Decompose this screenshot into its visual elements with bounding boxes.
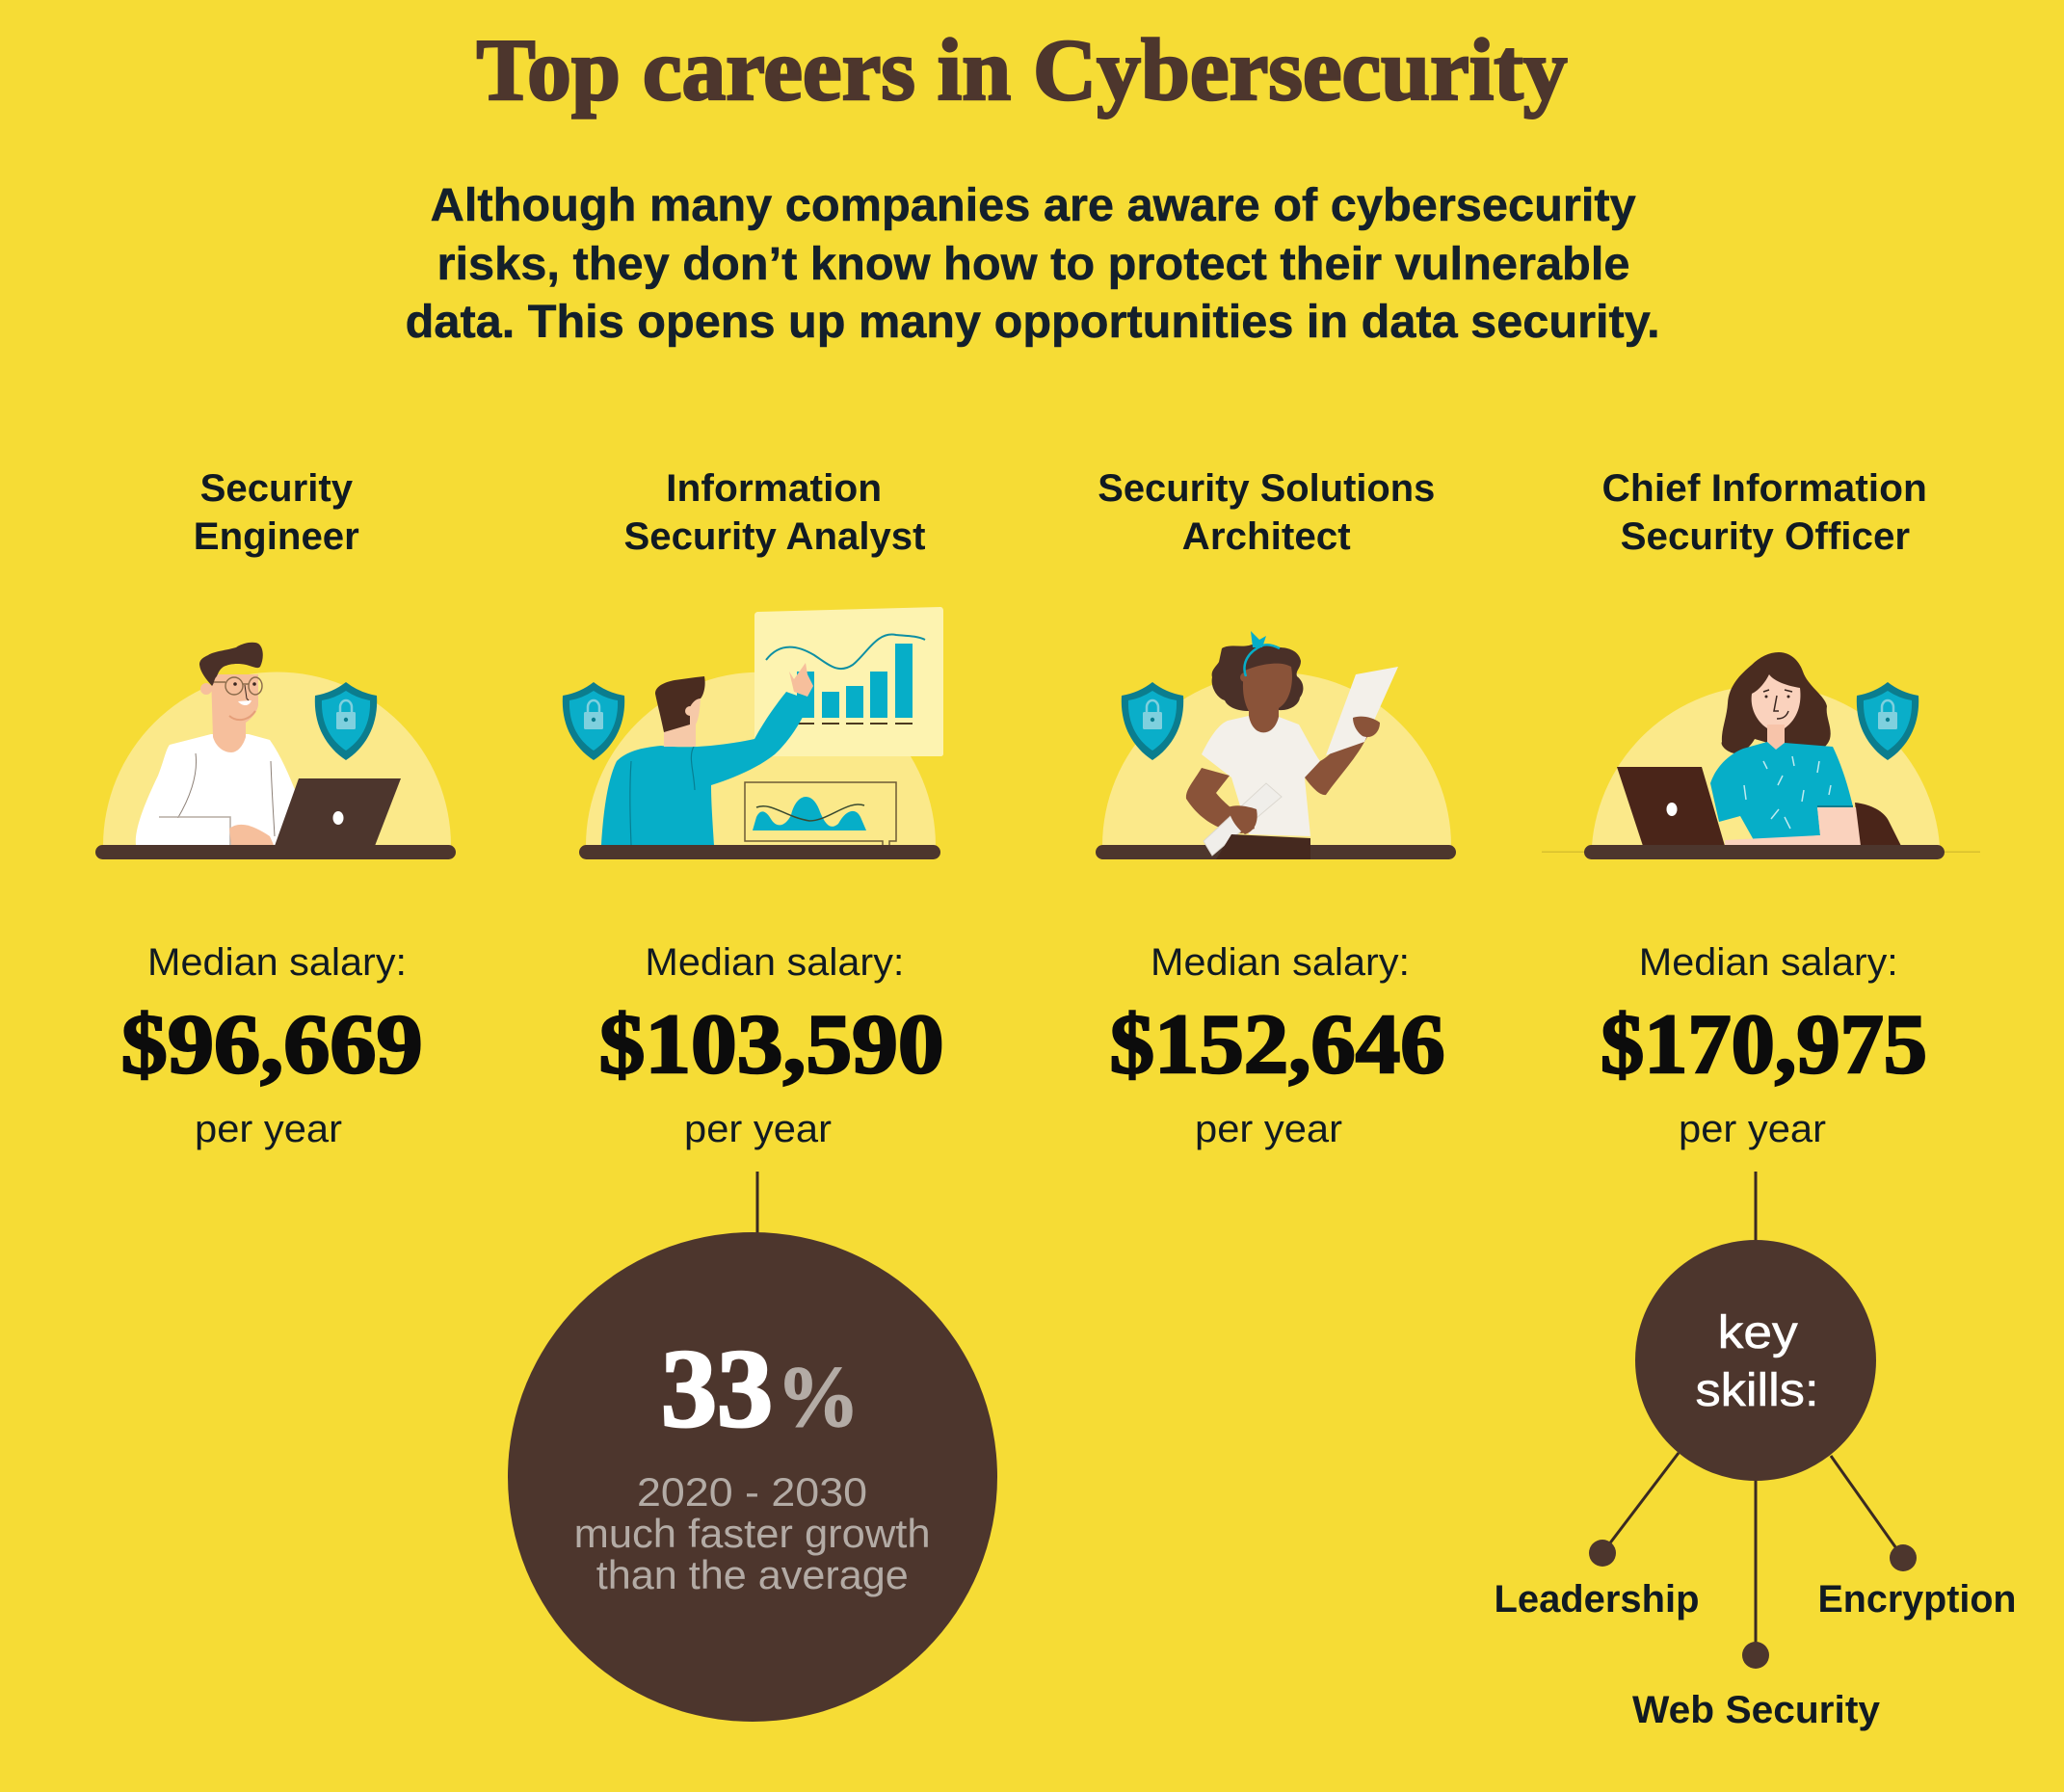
skill connector lines (1602, 1453, 1903, 1655)
small screen chart (745, 782, 896, 846)
salary: Information Security Analyst: $103,590 (599, 998, 944, 1092)
intro paragraph (406, 180, 1660, 348)
salary: Chief Information Security Officer (1601, 941, 1927, 1150)
callout: 33% growth: % (777, 1350, 860, 1445)
salary: Information Security Analyst: Median salary: (645, 941, 904, 984)
illustration: officer at laptop (1542, 652, 1980, 859)
callout: 33% growth: much faster growth (574, 1511, 931, 1556)
illustration: engineer at laptop (95, 643, 456, 859)
intro paragraph: data. This opens up many opportunities in data security. (406, 297, 1660, 348)
heading: Information Security Analyst: Information (666, 467, 882, 510)
callout: 33% growth: 2020 - 2030 (637, 1469, 867, 1515)
panel: Chief Information Security Officer (1494, 467, 2016, 1731)
heading: Information Security Analyst: Security Analyst (624, 515, 925, 558)
heading: Security Solutions Architect (1098, 467, 1435, 558)
salary: Security Solutions Architect: Median salary: (1151, 941, 1410, 984)
callout: 33% growth (508, 1232, 997, 1722)
connector line (755, 1172, 759, 1233)
salary: Security Engineer: Median salary: (147, 941, 407, 984)
panel: Security Solutions Architect (1096, 467, 1456, 1150)
intro paragraph: Although many companies are aware of cybersecurity (431, 180, 1636, 231)
icon: shield with lock (563, 682, 624, 760)
callout: 33% growth: 33 (661, 1328, 773, 1450)
skill: Leadership (1494, 1540, 1700, 1621)
callout: key skills circle: key (1718, 1307, 1798, 1358)
salary: Chief Information Security Officer: per year (1679, 1108, 1826, 1150)
heading: Chief Information Security Officer: Security Officer (1621, 515, 1910, 558)
skill: Encryption: Encryption (1817, 1578, 2016, 1621)
illustration: architect with document (1096, 631, 1456, 859)
heading: Security Engineer (194, 467, 359, 558)
salary: Chief Information Security Officer: $170,975 (1601, 998, 1927, 1092)
callout: key skills circle: skills: (1696, 1365, 1819, 1416)
salary: Information Security Analyst (599, 941, 944, 1150)
heading: Chief Information Security Officer: Chief Information (1601, 467, 1927, 510)
callout: key skills circle (1635, 1240, 1876, 1481)
connector line (1754, 1172, 1758, 1241)
icon: shield with lock (315, 682, 377, 760)
heading: Security Solutions Architect: Architect (1182, 515, 1351, 558)
intro paragraph: risks, they don’t know how to protect their vulnerable (437, 239, 1630, 290)
key skills diagram (1494, 1240, 2016, 1731)
salary: Security Engineer (121, 941, 423, 1150)
icon: shield with lock (1857, 682, 1918, 760)
heading: Security Solutions Architect: Security Solutions (1098, 467, 1435, 510)
salary: Information Security Analyst: per year (684, 1108, 832, 1150)
panel: Security Engineer (95, 467, 456, 1150)
salary: Security Engineer: $96,669 (121, 998, 423, 1092)
title: Top careers in Cybersecurity (476, 21, 1567, 119)
salary: Security Solutions Architect: per year (1195, 1108, 1342, 1150)
skill: Web Security: Web Security (1632, 1689, 1881, 1731)
skill: Encryption (1817, 1544, 2016, 1621)
salary: Security Solutions Architect (1110, 941, 1445, 1150)
heading: Chief Information Security Officer (1601, 467, 1927, 558)
skill: Web Security (1632, 1642, 1881, 1731)
skill: Leadership: Leadership (1494, 1578, 1700, 1621)
heading: Information Security Analyst (624, 467, 925, 558)
illustration: analyst pointing at chart (563, 607, 943, 859)
panel: Information Security Analyst (508, 467, 997, 1722)
salary: Security Engineer: per year (195, 1108, 342, 1150)
heading: Security Engineer: Security (200, 467, 354, 510)
salary: Chief Information Security Officer: Median salary: (1639, 941, 1898, 984)
salary: Security Solutions Architect: $152,646 (1110, 998, 1445, 1092)
callout: 33% growth: than the average (596, 1552, 909, 1597)
chart board (754, 607, 943, 756)
heading: Security Engineer: Engineer (194, 515, 359, 558)
icon: shield with lock (1122, 682, 1183, 760)
